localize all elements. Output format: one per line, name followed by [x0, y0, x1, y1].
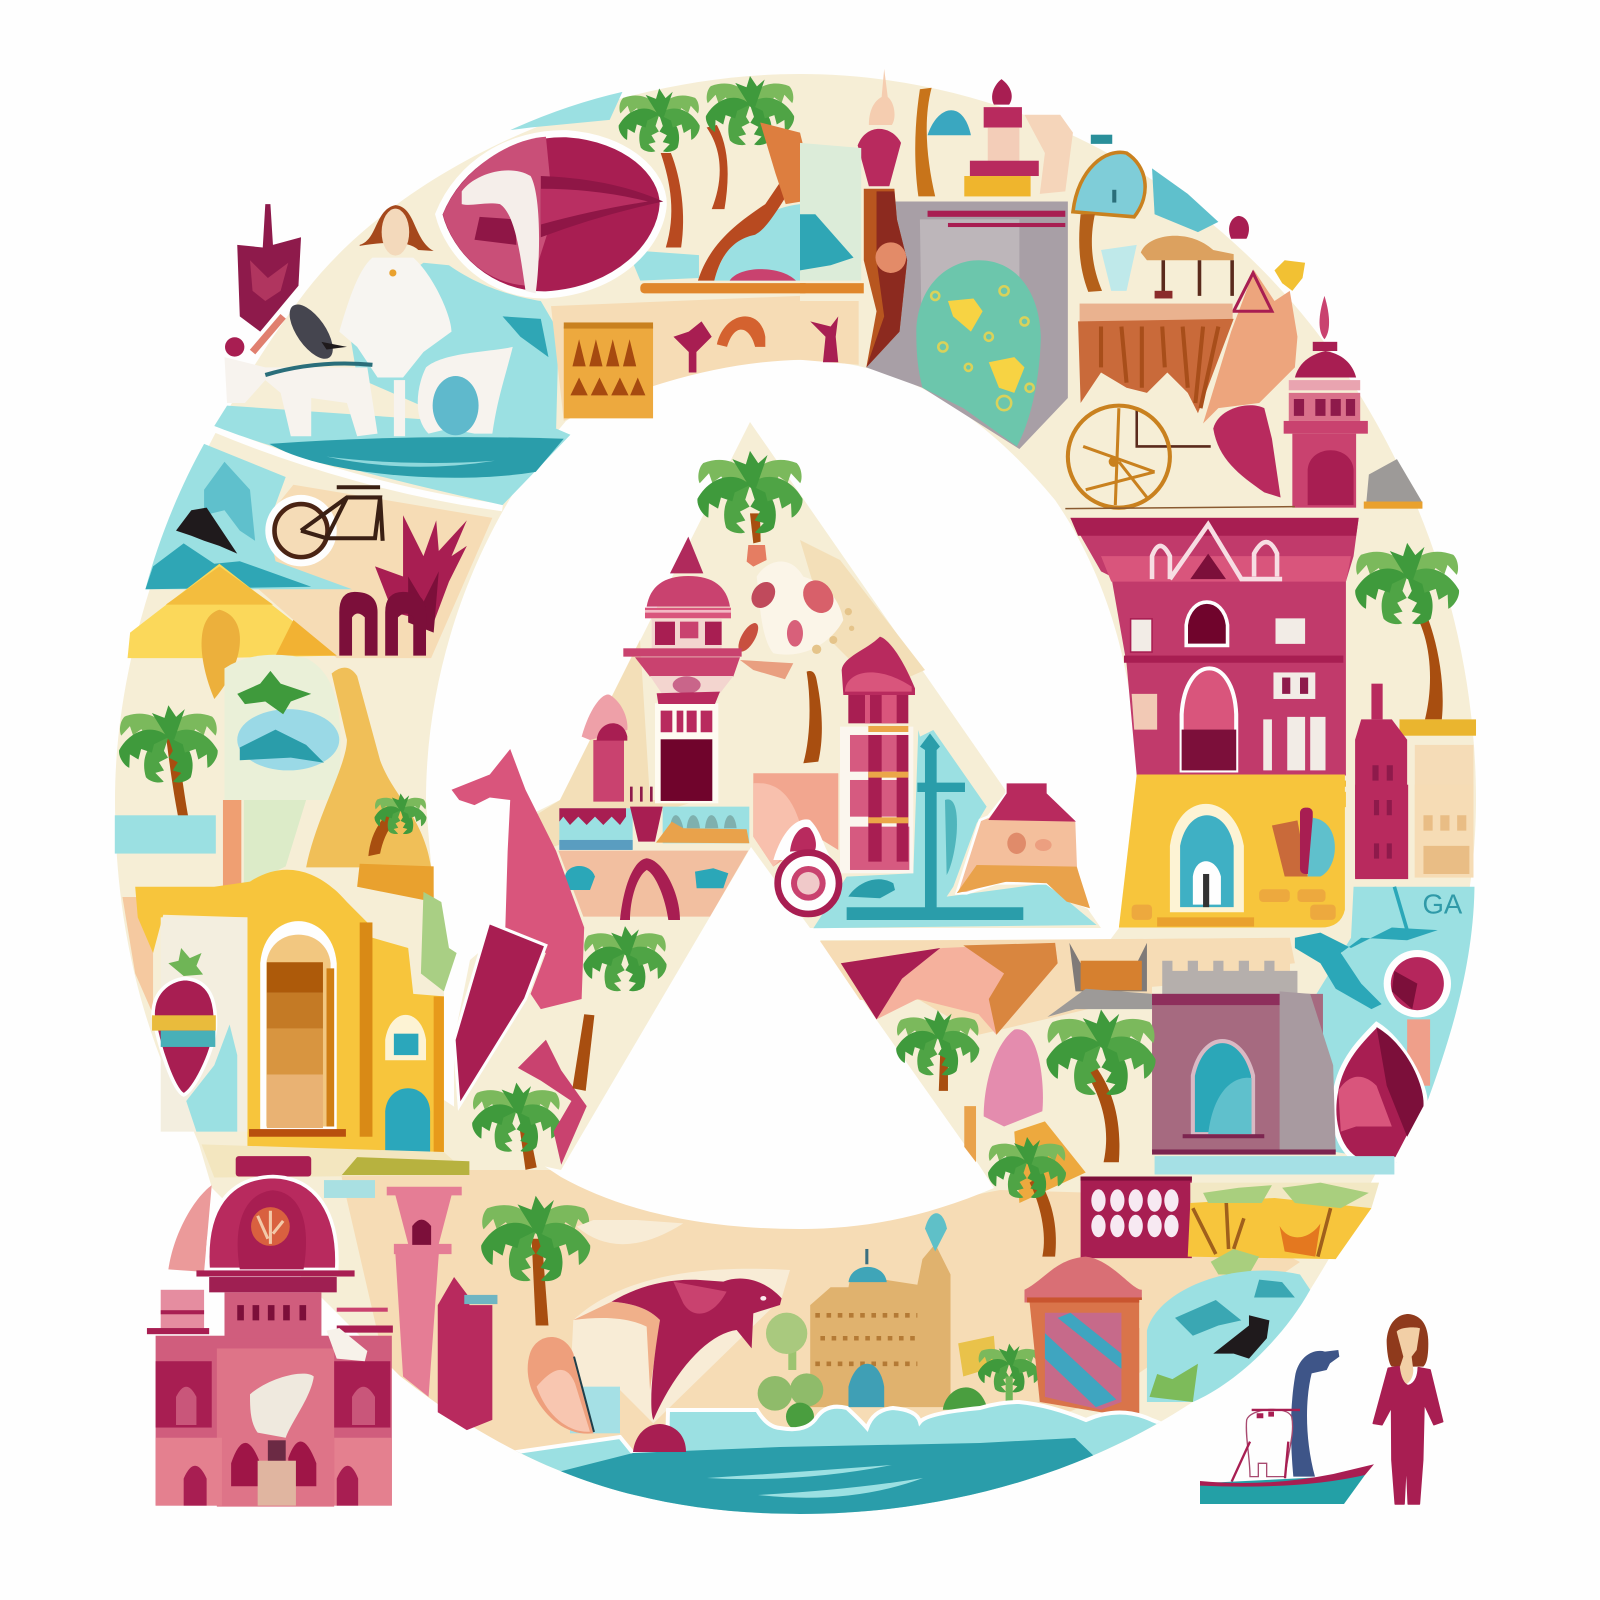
top-right quadrant illustrations [800, 69, 1476, 878]
pale green cell [244, 800, 306, 887]
teal patch right of clock [1152, 168, 1218, 232]
teal boat hull [1200, 1464, 1374, 1504]
savanna panel [1188, 1183, 1379, 1274]
crimson arches [339, 592, 426, 656]
sand wash on the A [520, 540, 925, 850]
orange bar [640, 283, 809, 293]
bottom-right quadrant illustrations [810, 774, 1474, 1417]
domed tower [1284, 296, 1368, 508]
red dot and stick [225, 316, 283, 357]
pale teal bar [1155, 1156, 1394, 1174]
apex palm [694, 450, 806, 567]
colosseum block [564, 322, 653, 418]
crimson jumpsuit [1373, 1367, 1443, 1504]
pale sand wash [570, 1220, 790, 1423]
clock [1073, 135, 1145, 217]
crimson dot [1229, 216, 1249, 239]
small palm near left arc [469, 1082, 564, 1170]
yellow tent [128, 564, 337, 699]
ring base shape [115, 74, 1476, 1514]
teal landscape panel [145, 444, 352, 589]
small pink tower [582, 695, 653, 802]
triangle A base shape [454, 422, 1101, 1170]
bottom-left quadrant illustrations [115, 749, 670, 1507]
brown hair [1387, 1314, 1428, 1367]
yellow temple [135, 870, 444, 1152]
small palm [368, 793, 428, 856]
peach post [1407, 1019, 1430, 1086]
face and neck [1397, 1327, 1420, 1385]
stone arch gate [1152, 991, 1336, 1155]
white dividing line [214, 429, 503, 508]
pink gem [984, 1029, 1043, 1127]
orange bar right [800, 283, 864, 293]
crimson tall block [438, 1277, 497, 1430]
tan block [1415, 745, 1473, 878]
yellow strip [1137, 781, 1346, 807]
sand band along the bottom of the ring [342, 1170, 1300, 1456]
teal shoulder patch [347, 263, 559, 434]
orange roof piece [357, 864, 434, 902]
terrace [558, 807, 749, 920]
swan on a boat [1200, 1350, 1374, 1504]
crimson dolphin [612, 1279, 782, 1420]
woman in crimson suit [1373, 1314, 1443, 1504]
striped shield building [1024, 1257, 1160, 1417]
grey stone arch [866, 202, 1068, 449]
pink bell tower [387, 1187, 462, 1397]
striped bell [957, 783, 1090, 908]
peach post [964, 1106, 976, 1162]
green foliage [421, 892, 457, 991]
turquoise shallow water [510, 1402, 1165, 1514]
peach band strip [820, 938, 1295, 1035]
dark fish [281, 298, 347, 366]
brown palm trunk [1079, 214, 1102, 292]
peach carrot shape [528, 1337, 594, 1434]
crimson plant sprig [810, 316, 838, 362]
teal map cell [1310, 887, 1474, 1162]
pale teal patch [324, 1180, 375, 1198]
domed crimson building [147, 1156, 393, 1507]
teal sky patch [510, 92, 622, 130]
twin palms [616, 75, 797, 247]
peach post [223, 800, 241, 889]
palm trio [893, 1008, 1160, 1162]
kangaroo wing [454, 922, 546, 1106]
sand left strip [122, 897, 153, 1014]
pedestal statue [964, 79, 1039, 196]
crimson tower with finial [1355, 684, 1407, 878]
salmon block [753, 773, 838, 867]
teal cloud [928, 110, 971, 135]
palm trunk [803, 671, 822, 763]
grey crenellated wall [1162, 961, 1297, 996]
teal lagoon [214, 406, 570, 505]
peach mountain [1203, 270, 1297, 423]
white tooth creature [1232, 1409, 1300, 1482]
crimson half ball [633, 1424, 686, 1452]
yellow ornament [1274, 260, 1305, 291]
crimson plant [375, 515, 467, 633]
map lettering: GA [1422, 888, 1463, 919]
pink creature [518, 1040, 587, 1165]
oval with white creature [439, 134, 663, 295]
crimson bird [1213, 405, 1281, 497]
crimson drop boat [1334, 1024, 1425, 1160]
top-left quadrant illustrations [115, 75, 816, 867]
green bush with palm [943, 1336, 1043, 1410]
teal hills [800, 214, 854, 270]
grey rubble [1047, 989, 1152, 1017]
interior of the A: apex palm, tower, terrace [558, 450, 854, 920]
striped tower [840, 637, 915, 873]
kangaroo body [452, 749, 584, 1009]
jeweled mosaic oval [916, 260, 1041, 446]
olive ledge band [202, 1144, 469, 1178]
gold bar [1399, 719, 1476, 736]
pink tower [623, 537, 742, 803]
crimson vase [858, 129, 901, 186]
pale teal patch [1101, 245, 1137, 291]
large crimson building [1070, 518, 1359, 776]
striped radish [152, 948, 216, 1095]
teal water around cross [813, 730, 1097, 928]
tan windowed block [1415, 785, 1473, 878]
yellow hill with palm [985, 1121, 1086, 1257]
teal waterfall [186, 1024, 237, 1132]
pink sliver [168, 1185, 212, 1272]
white horse [224, 347, 513, 436]
tan fort wall [551, 296, 800, 421]
yellow building [1119, 774, 1345, 928]
ground line [1065, 507, 1295, 509]
oasis bubble [224, 655, 341, 800]
bicycle [265, 487, 383, 566]
teal pool with bird [1147, 1270, 1310, 1402]
peach shadow [573, 1302, 660, 1390]
pavilion [1141, 236, 1234, 298]
tower bottom [1355, 785, 1408, 879]
palm right [1351, 542, 1463, 719]
swan neck [1291, 1350, 1339, 1477]
peach hand [1024, 115, 1073, 194]
golden wheel and frame [1068, 406, 1211, 508]
small crimson plant and arch [673, 316, 765, 372]
deep teal water [558, 1438, 1096, 1514]
brown trunk [915, 88, 935, 196]
white robed figure [339, 205, 452, 378]
grey rock [1364, 459, 1422, 509]
crimson and orange mountains [841, 943, 1058, 1035]
teal strip left [115, 815, 216, 854]
ornate column [864, 189, 907, 367]
teal panel beside column [800, 143, 861, 281]
dolphin shore scene [528, 1220, 823, 1434]
peach band under the A [820, 938, 1290, 1000]
pale blue cell [570, 1387, 620, 1433]
cream panel [161, 917, 247, 1132]
left palm tree [115, 704, 221, 842]
crimson mask [237, 204, 301, 332]
carved cliff [1078, 304, 1234, 413]
yellow giraffe [306, 668, 431, 867]
teal cross monument [847, 733, 1023, 920]
concentric circle [773, 819, 839, 914]
right side of the A: tower, cross, bell [773, 637, 1097, 928]
tan terrain [230, 485, 492, 658]
sand cell [800, 301, 859, 365]
teal patch beside palms [628, 250, 699, 281]
speckled terrain [735, 562, 854, 679]
central white hole [426, 360, 1137, 1229]
teal serpent [1295, 928, 1438, 1009]
crimson window box [1081, 1177, 1192, 1258]
red ball [1384, 950, 1451, 1017]
brown tree and dome [698, 122, 816, 281]
teal stroke [1394, 887, 1407, 930]
donkey head [1069, 943, 1147, 991]
central palm [477, 1195, 594, 1326]
peach cone [869, 69, 895, 125]
green bushes [758, 1313, 823, 1431]
tan palace [810, 1213, 951, 1407]
trunk and palm in the A [572, 925, 670, 1091]
